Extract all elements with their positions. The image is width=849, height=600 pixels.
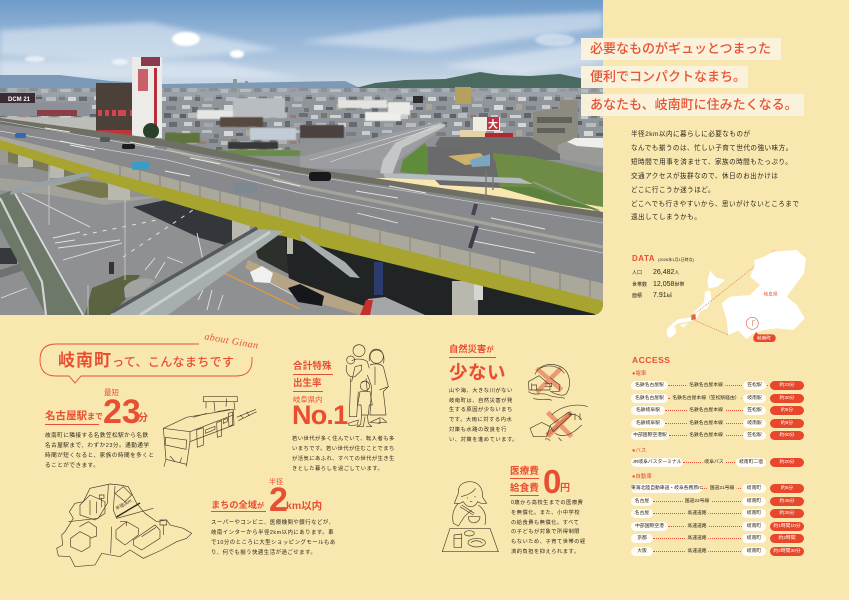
access: car heading: ●自動車 bbox=[632, 474, 652, 480]
section: birth rate: No.1 bbox=[292, 400, 347, 430]
section: birth rate: 出生率 bbox=[293, 378, 322, 389]
access row car 1 bbox=[631, 484, 804, 493]
access row bus: JR岐阜バスターミナル bbox=[632, 460, 682, 465]
access row car 6: 大阪 bbox=[637, 549, 647, 554]
section: free medical and lunch: もないため、子育て世帯の経 bbox=[511, 539, 586, 545]
access row car 5: 京都 bbox=[637, 536, 647, 541]
intro text: 交通アクセスが抜群なので、休日のお出かけは bbox=[631, 173, 778, 180]
access row 3: 名鉄岐阜駅 bbox=[636, 408, 660, 413]
section: few natural disasters: 生する原因が少ないまち bbox=[449, 407, 513, 413]
access row 3: 笠松駅 bbox=[747, 408, 762, 413]
dcm store bbox=[0, 93, 90, 116]
map of Japan and Gifu: 岐南町 bbox=[757, 335, 771, 342]
data block: DATA bbox=[632, 254, 655, 263]
access row car 2: 約45分 bbox=[780, 499, 794, 504]
access row car 6: 約2時間30分 bbox=[773, 549, 801, 554]
headline: あなたも、岐南町に住みたくなる。 bbox=[590, 97, 798, 112]
data block: 世帯数 bbox=[632, 282, 647, 288]
access row 1: 約23分 bbox=[780, 383, 794, 388]
access row car 2: 国道22号線 bbox=[685, 499, 709, 504]
section: few natural disasters: 対策も水路の改良を行 bbox=[449, 427, 507, 433]
section: 2km radius: 半径 bbox=[269, 479, 283, 486]
access row car 3: 名古屋 bbox=[635, 511, 649, 516]
section: free medical and lunch: を無償化。また、小中学校 bbox=[511, 510, 580, 516]
section: Nagoya 23 minutes bbox=[45, 388, 154, 469]
access row 5: 約60分 bbox=[780, 433, 794, 438]
section: free medical and lunch: 0歳から高校生までの医療費 bbox=[511, 500, 583, 506]
access: train heading: ●電車 bbox=[632, 371, 646, 377]
access row 1 bbox=[631, 381, 804, 390]
cars bbox=[15, 133, 331, 306]
access row 2: 名鉄名古屋駅 bbox=[635, 396, 664, 401]
data block: 人口 bbox=[632, 270, 642, 276]
data block: 面積 bbox=[632, 293, 642, 299]
data block: (2026年1月1日時点) bbox=[658, 257, 694, 262]
access row 5: 笠松駅 bbox=[747, 433, 762, 438]
access row car 1: 岐南町 bbox=[747, 486, 761, 491]
access row 4 bbox=[631, 419, 804, 428]
section: 2km radius: 岐南インターから半径2km以内にあります。車 bbox=[211, 530, 334, 536]
section: birth rate: 岐阜県内 bbox=[293, 395, 323, 404]
section: free medical and lunch: 医療費 bbox=[510, 466, 539, 477]
section: free medical and lunch: 0 bbox=[543, 463, 561, 500]
section: free medical and lunch: の給食費も無償化。すべて bbox=[511, 520, 579, 526]
access row car 2: 名古屋 bbox=[635, 499, 649, 504]
section: Nagoya 23 minutes: 岐南町に隣接する名鉄笠松駅から名鉄 bbox=[45, 433, 149, 439]
section: birth rate: 合計特殊 bbox=[293, 361, 332, 372]
section: Nagoya 23 minutes: 23 bbox=[103, 393, 141, 431]
access row 5: 中部国際空港駅 bbox=[633, 433, 667, 438]
intro text: 遠出してしまうかも。 bbox=[631, 214, 701, 221]
access row 2: 岐南駅 bbox=[747, 396, 762, 401]
intro text: 短時間で用事を済ませて、家族の時間もたっぷり。 bbox=[631, 159, 792, 166]
section: Nagoya 23 minutes: 分 bbox=[138, 413, 148, 424]
access row 4: 岐南駅 bbox=[747, 421, 762, 426]
access row 1: 名鉄名古屋駅 bbox=[635, 383, 664, 388]
access row car 6 bbox=[631, 547, 804, 556]
access: bus heading: ●バス bbox=[632, 448, 646, 454]
access row bus: 約20分 bbox=[780, 460, 794, 465]
yellow girder and parapet bbox=[0, 136, 603, 316]
section: Nagoya 23 minutes: 名古屋駅まで bbox=[45, 410, 103, 422]
title speech bubble bbox=[40, 344, 252, 384]
map radius label: 半径2km bbox=[115, 498, 132, 511]
section: few natural disasters: い、対策を進めています。 bbox=[449, 437, 518, 443]
section: Nagoya 23 minutes: 名古屋駅まで、わずか23分。通勤通学 bbox=[45, 443, 150, 449]
access row car 5 bbox=[631, 534, 804, 543]
access row bus: 岐南町二宿 bbox=[739, 460, 763, 465]
access row 3: 名鉄名古屋本線 bbox=[689, 408, 723, 413]
section: free medical and lunch: 給食費 bbox=[510, 483, 539, 494]
access row 3 bbox=[631, 406, 804, 415]
access row 2: 名鉄名古屋本線（笠松駅経由） bbox=[672, 396, 740, 401]
headline: 便利でコンパクトなまち。 bbox=[590, 69, 746, 84]
access row 3: 約5分 bbox=[781, 408, 793, 413]
section: 2km radius: スーパーやコンビニ、医療機関や銀行などが、 bbox=[211, 520, 335, 526]
access row car 6: 高速道路 bbox=[687, 549, 707, 554]
access heading: ACCESS bbox=[632, 355, 670, 365]
access row 1: 笠松駅 bbox=[747, 383, 762, 388]
stairs under highway bbox=[300, 234, 360, 278]
access row 4: 約6分 bbox=[781, 421, 793, 426]
access row car 4: 高速道路 bbox=[687, 524, 707, 529]
intro text: 半径2km以内に暮らしに必要なものが bbox=[631, 131, 750, 138]
section: birth rate: が活気にあふれ、すべての世代が生き生 bbox=[292, 456, 395, 462]
section: Nagoya 23 minutes: 時間が短くなると、家族の時間を多くと bbox=[45, 453, 154, 459]
access row 5 bbox=[631, 431, 804, 440]
ground and intersection bbox=[0, 148, 603, 315]
section: few natural disasters: 少ない bbox=[449, 362, 506, 383]
access row car 4 bbox=[631, 522, 804, 531]
section: 2km radius: km以内 bbox=[286, 500, 322, 512]
section: birth rate: いまちです。若い世代が住むことでまち bbox=[292, 446, 395, 452]
data block bbox=[632, 254, 694, 299]
section: 2km radius: り、何でも揃う快適生活が過ごせます。 bbox=[211, 550, 316, 556]
about Ginan script label: about Ginan bbox=[204, 331, 259, 352]
access row car 3: 岐南町 bbox=[747, 511, 761, 516]
access row car 4: 中部国際空港 bbox=[635, 524, 664, 529]
headline: 必要なものがギュッとつまった bbox=[590, 41, 771, 56]
access row car 3 bbox=[631, 509, 804, 518]
title speech bubble: 岐南町って、こんなまちです bbox=[58, 351, 234, 370]
section: few natural disasters bbox=[449, 344, 518, 443]
section: 2km radius: まちの全域が bbox=[211, 500, 264, 510]
access row bus: 岐阜バス bbox=[704, 460, 724, 465]
section: free medical and lunch: 済的負担を抑えられます。 bbox=[511, 549, 579, 555]
access row car 3: 約35分 bbox=[780, 511, 794, 516]
access row 2: 約30分 bbox=[780, 396, 794, 401]
intro text: なんでも揃うのは、忙しい子育て世代の強い味方。 bbox=[631, 145, 793, 152]
data block: 26,482人 bbox=[653, 269, 679, 276]
access row 2 bbox=[631, 394, 804, 403]
access row car 1: 約5分 bbox=[781, 486, 793, 491]
access row car 5: 高速道路 bbox=[687, 536, 707, 541]
intro text: どこに行こうか迷うほど。 bbox=[631, 187, 715, 194]
section: few natural disasters: 岐南町は、自然災害が発 bbox=[449, 398, 513, 404]
access row bus bbox=[631, 458, 804, 467]
highway piers bbox=[0, 146, 483, 315]
map of Japan and Gifu: 岐阜県 bbox=[764, 291, 778, 298]
crossing pedestrian bridge bbox=[110, 228, 284, 315]
intro text bbox=[631, 130, 799, 221]
red and white shop: 大 bbox=[488, 116, 498, 131]
dcm store: DCM 21 bbox=[8, 97, 31, 103]
section: few natural disasters: 山や海、大きな川がない bbox=[449, 388, 513, 394]
section: 2km radius: 2 bbox=[269, 481, 288, 519]
section: 2km radius bbox=[211, 478, 336, 556]
elevated highway road surface bbox=[0, 118, 603, 284]
access row car 3: 高速道路 bbox=[687, 511, 707, 516]
section: birth rate bbox=[292, 360, 395, 472]
section: birth rate: 若い世代が多く住んでいて、転入者も多 bbox=[292, 436, 395, 442]
section: free medical and lunch: 円 bbox=[560, 483, 570, 494]
section: Nagoya 23 minutes: ることができます。 bbox=[45, 463, 99, 469]
access row car 1: 国道21号線 bbox=[710, 486, 734, 491]
access row car 4: 岐南町 bbox=[747, 524, 761, 529]
section: free medical and lunch: の子どもが対象で所得制限 bbox=[511, 529, 580, 535]
headline bbox=[581, 38, 804, 116]
access row 1: 名鉄名古屋本線 bbox=[689, 383, 723, 388]
access row 4: 名鉄岐阜駅 bbox=[636, 421, 660, 426]
access row car 1: 東海北陸自動車道・岐阜各務原IC bbox=[631, 486, 703, 491]
red and white shop bbox=[460, 117, 513, 137]
section: few natural disasters: です。大雨に対する内水 bbox=[449, 417, 512, 423]
section: birth rate: きとした暮らしを過ごしています。 bbox=[292, 466, 383, 472]
section: few natural disasters: 自然災害が bbox=[449, 344, 494, 354]
left pedestrian overpass bbox=[0, 172, 92, 315]
access row car 6: 岐南町 bbox=[747, 549, 761, 554]
section: free medical and lunch bbox=[510, 463, 586, 555]
access row car 5: 約2時間 bbox=[778, 536, 796, 541]
access row car 2: 岐南町 bbox=[747, 499, 761, 504]
access row car 4: 約1時間10分 bbox=[773, 524, 801, 529]
intro text: どこへでも行きやすいから、思いがけないところまで bbox=[631, 201, 799, 208]
section: 2km radius: で10分のところに大型ショッピングモールもあ bbox=[211, 540, 336, 546]
data block: 12,058世帯 bbox=[653, 281, 684, 288]
section: Nagoya 23 minutes: 最短 bbox=[104, 388, 119, 397]
access row 5: 名鉄名古屋本線 bbox=[689, 433, 723, 438]
access row car 5: 岐南町 bbox=[747, 536, 761, 541]
aerial photo of Ginan highway bbox=[0, 0, 603, 315]
access row car 2 bbox=[631, 497, 804, 506]
data block: 7.91㎢ bbox=[653, 292, 672, 299]
access row 4: 名鉄名古屋本線 bbox=[689, 421, 723, 426]
